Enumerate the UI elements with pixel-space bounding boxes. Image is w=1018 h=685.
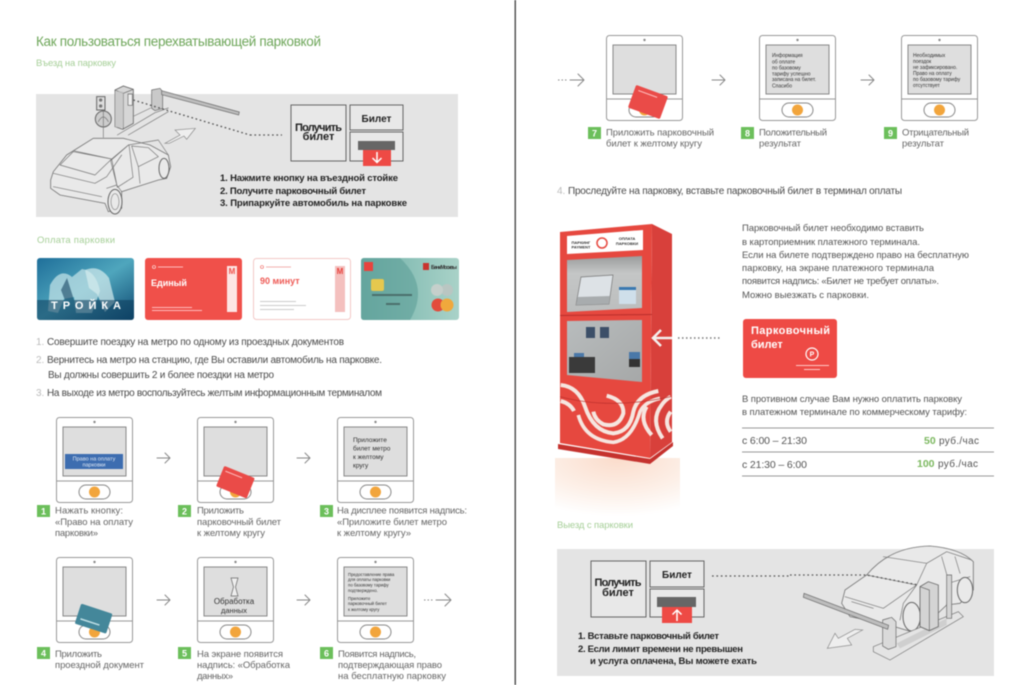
step 9 terminal: поездок [913,59,932,65]
step 3 caption: На дисплее появится надпись: [337,506,467,516]
step 4 caption: проездной документ [55,660,145,671]
arrow: continued from left page [558,79,568,81]
step 8 terminal: по базовому [772,66,801,72]
step 9 terminal: не зафиксировано. [913,65,957,71]
arrow [157,453,170,463]
step 5 caption: надпись: «Обработка [197,660,291,671]
numbered list: payment steps: На выходе из метро воспользуйтесь желтым информационным терминалом [47,387,382,399]
step 8 terminal: об оплате [772,60,795,66]
step 8 caption: результат [759,138,802,150]
step 7 caption: билет к желтому кругу [606,138,702,150]
step 9 caption [884,127,969,150]
numbered list: payment steps [36,337,382,399]
label: ticket [650,561,704,587]
step 5 caption: данных» [197,671,233,682]
numbered list: payment steps: Совершите поездку на метро по одному из проездных документов [47,337,344,348]
step 5 caption [178,647,291,682]
arrow: insert ticket [653,330,672,346]
entry instructions [220,173,407,209]
step 2 caption [178,505,282,539]
floor reflection [555,458,680,516]
page divider [514,0,516,685]
kiosk header: ПАРКИНГ [572,240,591,245]
arrow: drive direction [165,128,195,143]
step 6 terminal: для оплаты парковки [348,577,391,582]
illustration: car at entry gate [51,86,250,214]
card: bank card [361,258,459,320]
arrow [861,75,874,85]
card: Troika [37,258,134,320]
step 2 caption: к желтому кругу [197,528,265,539]
title: Как пользоваться перехватывающей парковкой [36,34,321,49]
step 6 caption: на бесплатную парковку [338,671,446,682]
tariff intro text: В противном случае Вам нужно оплатить парковку [742,394,962,405]
button: get ticket [591,561,646,617]
kiosk header: PAYMENT [572,244,591,250]
tariff table: руб./час [939,435,979,447]
entry instructions: 3. Припаркуйте автомобиль на парковке [220,198,407,209]
step 9 terminal: отсутствует [913,83,941,89]
illustration: car at exit gate [790,546,973,660]
numbered list: payment steps: 2. [36,355,44,366]
dotted line from button panel [712,575,790,577]
step 6 caption: 6 [324,648,329,658]
card: bank card: Банк Москвы [431,265,457,271]
label: ticket: Билет [362,114,392,125]
card: 90 minutes [254,258,350,320]
step 4 caption [37,647,145,671]
terminal instructions text: в картоприемник платежного терминала. [742,237,920,248]
step 9 terminal: Право на оплату [913,71,952,77]
terminal instructions text: Если на билете подтверждено право на бесплатную [742,250,969,261]
button: get ticket: Получить [594,577,642,589]
dotted line to button panel [250,134,282,136]
terminal instructions text: Парковочный билет необходимо вставить [742,223,924,234]
step 1 caption: парковки» [55,528,98,539]
step 6 terminal: к желтому кругу [348,607,380,612]
step 3 terminal [337,418,414,502]
step 2 caption: парковочный билет [197,517,282,528]
card: Edinyi: Единый [151,278,187,288]
kiosk header: ОПЛАТА [619,236,635,241]
ticket slot with red arrow [650,589,704,623]
step 3 caption: 3 [324,506,329,516]
step 7 caption: Приложить парковочный [606,128,714,138]
tariff intro text [742,394,967,418]
entry instructions: 1. Нажмите кнопку на въездной стойке [220,173,398,184]
parking ticket card: Парковочный [751,325,830,337]
kiosk upper bay with screen [567,256,642,312]
step 3 caption [320,505,467,539]
step 6 terminal: по базовому тарифу [348,582,389,588]
exit instructions [578,631,757,667]
step 3 caption: «Приложите билет метро [337,517,447,528]
step 2 caption: Приложить [197,506,244,516]
tariff table: 100 [917,458,935,470]
numbered list: payment steps: Вы должны совершить 2 и более поездки на метро [48,369,274,381]
arrow [297,453,310,463]
terminal instructions text: парковку, на экране платежного терминала [742,263,935,274]
step 3 terminal: билет метро [353,444,391,452]
parking ticket card: P [810,352,815,358]
heading: exit: Выезд с парковки [557,520,633,531]
tariff table: с 6:00 – 21:30 [742,435,807,447]
step 1 caption: «Право на оплату [55,517,133,528]
panel: exit from parking [557,546,994,676]
step 2 terminal [197,418,274,502]
step 3 terminal: кругу [353,462,369,470]
exit instructions: и услуга оплачена, Вы можете ехать [590,656,757,667]
tariff table: 50 [924,435,936,447]
step 5 terminal [197,558,274,642]
kiosk lower panel [567,320,642,382]
step 6 terminal: Приложите [348,596,371,601]
step 4 caption: 4 [41,648,46,658]
step 4 terminal [56,558,132,642]
step 8 caption: 8 [745,128,750,138]
numbered step 4: 4. [557,186,565,197]
arrow: continues on right page [424,599,434,601]
step 4 caption: Приложить [55,649,102,660]
numbered step 4: Проследуйте на парковку, вставьте парковочный билет в терминал оплаты [568,185,902,197]
payment terminal kiosk [555,224,680,516]
step 2 caption: 2 [182,506,187,516]
parking ticket card [743,319,837,378]
step 1 terminal [56,418,132,502]
heading: entry: Въезд на парковку [36,58,116,69]
kiosk swirl decoration [560,385,671,442]
card: 90 minutes: М [337,267,344,276]
button: get ticket: билет [602,587,634,599]
card: Edinyi [145,258,242,320]
step 9 caption: 9 [888,128,893,138]
step 3 terminal: к желтому [353,454,384,461]
step 6 terminal: парковочный билет [348,601,387,606]
tariff table: с 21:30 – 6:00 [742,459,807,471]
step 5 caption: На экране появится [197,649,283,660]
dotted line to ticket [678,337,720,339]
terminal instructions text [742,223,969,301]
step 7 caption [588,127,714,150]
tariff intro text: в платежном терминале по коммерческому тарифу: [742,407,967,418]
step 1 terminal: парковки [82,462,106,468]
step 6 terminal: Предоставление права [348,572,395,577]
step 9 caption: Отрицательный [902,128,969,138]
button: get ticket: билет [303,131,335,143]
arrow [157,595,170,605]
button: get ticket [291,105,346,161]
kiosk header [567,230,643,254]
kiosk body [650,224,672,458]
exit instructions: 2. Если лимит времени не превышен [578,644,743,655]
heading: payment: Оплата парковки [37,235,115,246]
step 1 caption: Нажать кнопку: [55,506,123,516]
terminal instructions text: появится надпись: «Билет не требует оплаты». [742,276,939,287]
numbered list: payment steps: 3. [36,388,44,399]
step 6 terminal [337,558,414,642]
arrow head: continues [436,594,451,606]
step 5 terminal: данных [221,606,247,615]
kiosk header: ПАРКОВКИ [616,241,638,246]
label: ticket [350,105,403,130]
step 6 terminal: подтверждено. [348,588,378,593]
step 7 caption: 7 [592,128,597,138]
exit instructions: 1. Вставьте парковочный билет [578,631,719,642]
step 1 caption: 1 [41,506,46,516]
card: Edinyi: М [229,267,236,276]
button: get ticket: Получить [295,122,342,134]
tariff table [742,428,994,476]
step 8 terminal [759,36,836,120]
entry instructions: 2. Получите парковочный билет [220,186,366,197]
step 8 caption [741,127,827,150]
step 8 terminal: Информация [772,53,803,59]
step 6 caption: Появится надпись, [338,649,416,660]
arrow [297,595,310,605]
terminal instructions text: Можно выезжать с парковки. [742,290,869,301]
numbered list: payment steps: Вернитесь на метро на станцию, где Вы оставили автомобиль на парковке. [47,354,382,366]
step 8 terminal: тарифу успешно [772,72,811,78]
tariff table: руб./час [938,458,978,470]
numbered list: payment steps: 1. [36,337,44,348]
arrow [712,75,725,85]
step 7 terminal [606,36,682,120]
step 6 caption [320,647,446,682]
step 1 caption [37,505,133,539]
panel: entry to parking [36,86,458,217]
parking ticket card: билет [751,339,783,351]
step 9 terminal: Необходимых [913,53,946,59]
ticket slot with red arrow [350,132,403,166]
step 3 caption: к желтому кругу» [337,528,411,539]
step 9 caption: результат [902,138,945,150]
step 8 terminal: Спасибо [772,84,792,90]
step 3 terminal: Приложите [353,437,387,444]
card: Troika: ТРОЙКА [51,299,121,312]
step 8 terminal: записана на билет. [772,77,816,83]
label: ticket: Билет [662,570,692,581]
step 5 terminal: Обработка [214,597,255,606]
step 8 caption: Положительный [759,128,827,138]
step 9 terminal: по базовому тарифу [913,77,961,83]
card: 90 minutes: 90 минут [260,276,300,286]
step 9 terminal [901,36,978,120]
arrow head: continued [570,74,584,86]
step 1 terminal: Право на оплату [73,456,116,462]
step 5 caption: 5 [182,648,187,658]
step 6 caption: подтверждающая право [338,660,442,671]
